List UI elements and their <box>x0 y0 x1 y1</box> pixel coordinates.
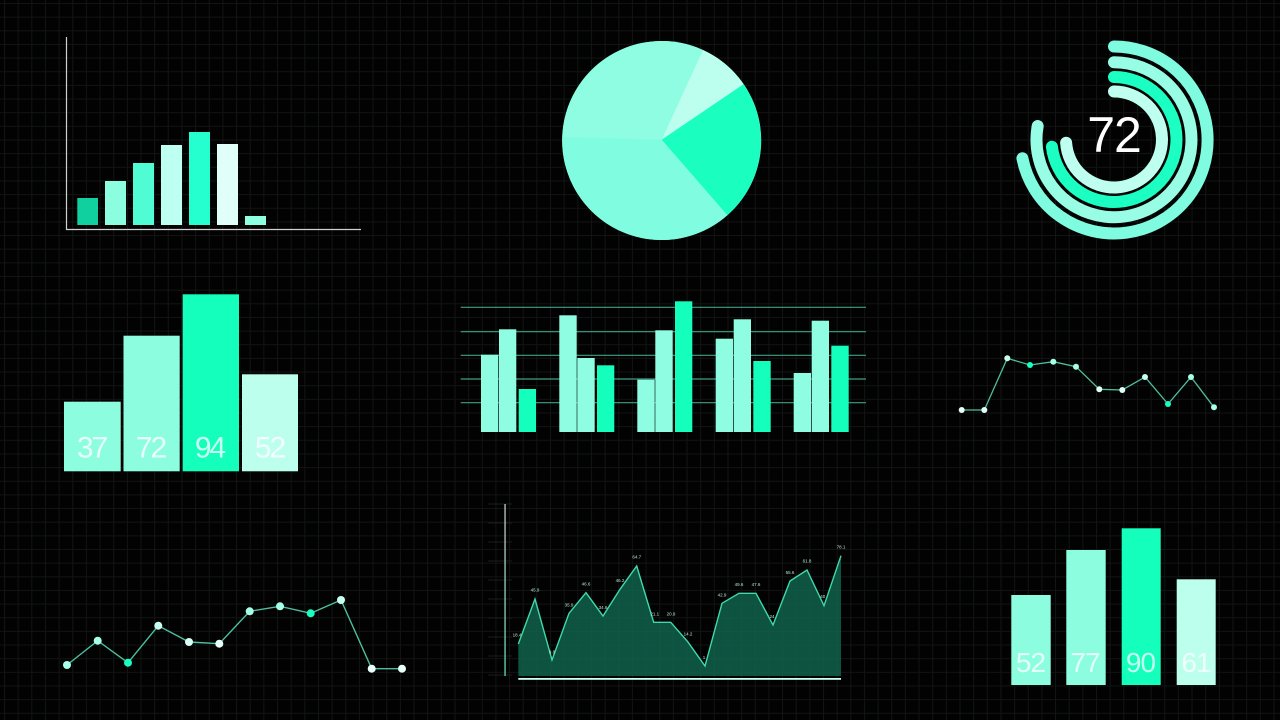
bar 61: 61 <box>1181 647 1211 678</box>
area fill <box>518 556 841 676</box>
bar 37: 37 <box>77 432 107 464</box>
data points <box>959 355 1217 413</box>
panel: line chart, middle right <box>959 355 1217 413</box>
data labels: 40 <box>820 594 826 599</box>
bar 90 <box>1122 528 1161 685</box>
data labels: 42.9 <box>718 592 727 598</box>
data labels: 78.1 <box>837 544 846 550</box>
bar 72: 72 <box>136 432 166 464</box>
x axis <box>518 678 841 680</box>
data labels: 20.9 <box>667 612 676 616</box>
y axis <box>488 504 512 676</box>
bar 77 <box>1066 550 1106 685</box>
pie base disc <box>562 41 761 240</box>
panel: labelled bar chart, middle left <box>64 294 298 471</box>
bar 52 <box>1011 595 1051 685</box>
data labels: 21.1 <box>650 612 660 616</box>
data labels: 61.8 <box>803 558 812 564</box>
bar 72 <box>124 336 180 471</box>
data labels: 1 <box>703 655 706 660</box>
bar group 1 <box>481 329 536 432</box>
data labels: 45.9 <box>531 588 540 592</box>
bar 37 <box>64 402 121 471</box>
bar group 4 <box>716 319 771 432</box>
data labels: 35.9 <box>565 602 574 608</box>
data labels <box>513 544 846 660</box>
bar 94 <box>183 294 239 471</box>
data labels: 46.2 <box>616 578 625 583</box>
bar 52: 52 <box>255 432 285 464</box>
panel: top-left bar chart with axes <box>66 37 361 230</box>
bar 52: 52 <box>1016 647 1045 678</box>
pie slice: upper aqua <box>562 41 703 140</box>
pie slice: pale <box>662 50 744 140</box>
bar 52 <box>242 374 298 471</box>
line <box>962 358 1214 410</box>
data labels: 34.6 <box>599 605 608 610</box>
area line <box>518 556 841 666</box>
panel: labelled bar chart, bottom right <box>1011 528 1216 685</box>
ring: third <box>1052 77 1176 202</box>
data labels: 18.4 <box>513 632 522 638</box>
bar group 5 <box>794 321 849 432</box>
data labels: 64.7 <box>632 554 642 560</box>
data labels: 55.6 <box>786 570 795 575</box>
bar 61 <box>1177 579 1216 685</box>
pie slice: bright green <box>662 84 761 215</box>
panel: area chart, bottom centre <box>488 504 846 680</box>
ring: outer <box>1022 46 1208 233</box>
data labels: 9.8 <box>549 650 556 654</box>
data labels: 24 <box>769 614 775 619</box>
data labels: 49.6 <box>735 582 744 587</box>
data labels: 14.2 <box>684 632 693 636</box>
bars <box>77 132 266 225</box>
ring: inner <box>1066 92 1162 188</box>
line <box>67 600 402 669</box>
bar 90: 90 <box>1126 647 1155 678</box>
gauge value: 72 <box>1087 107 1141 163</box>
data labels: 47.6 <box>752 582 761 587</box>
bar 77: 77 <box>1070 647 1100 678</box>
panel: grouped bar chart, centre <box>461 301 866 432</box>
data labels: 46.6 <box>582 582 591 586</box>
panel: pie chart <box>562 41 761 240</box>
bar group 3 <box>637 301 692 432</box>
panel: radial progress gauge <box>1022 46 1208 233</box>
data points <box>63 596 406 673</box>
ring: second <box>1036 62 1191 217</box>
bar group 2 <box>559 315 614 432</box>
panel: line chart, bottom left <box>63 596 406 673</box>
pie slice: lower aqua <box>562 137 727 240</box>
chart axes <box>66 37 361 230</box>
bar 94: 94 <box>195 432 225 464</box>
